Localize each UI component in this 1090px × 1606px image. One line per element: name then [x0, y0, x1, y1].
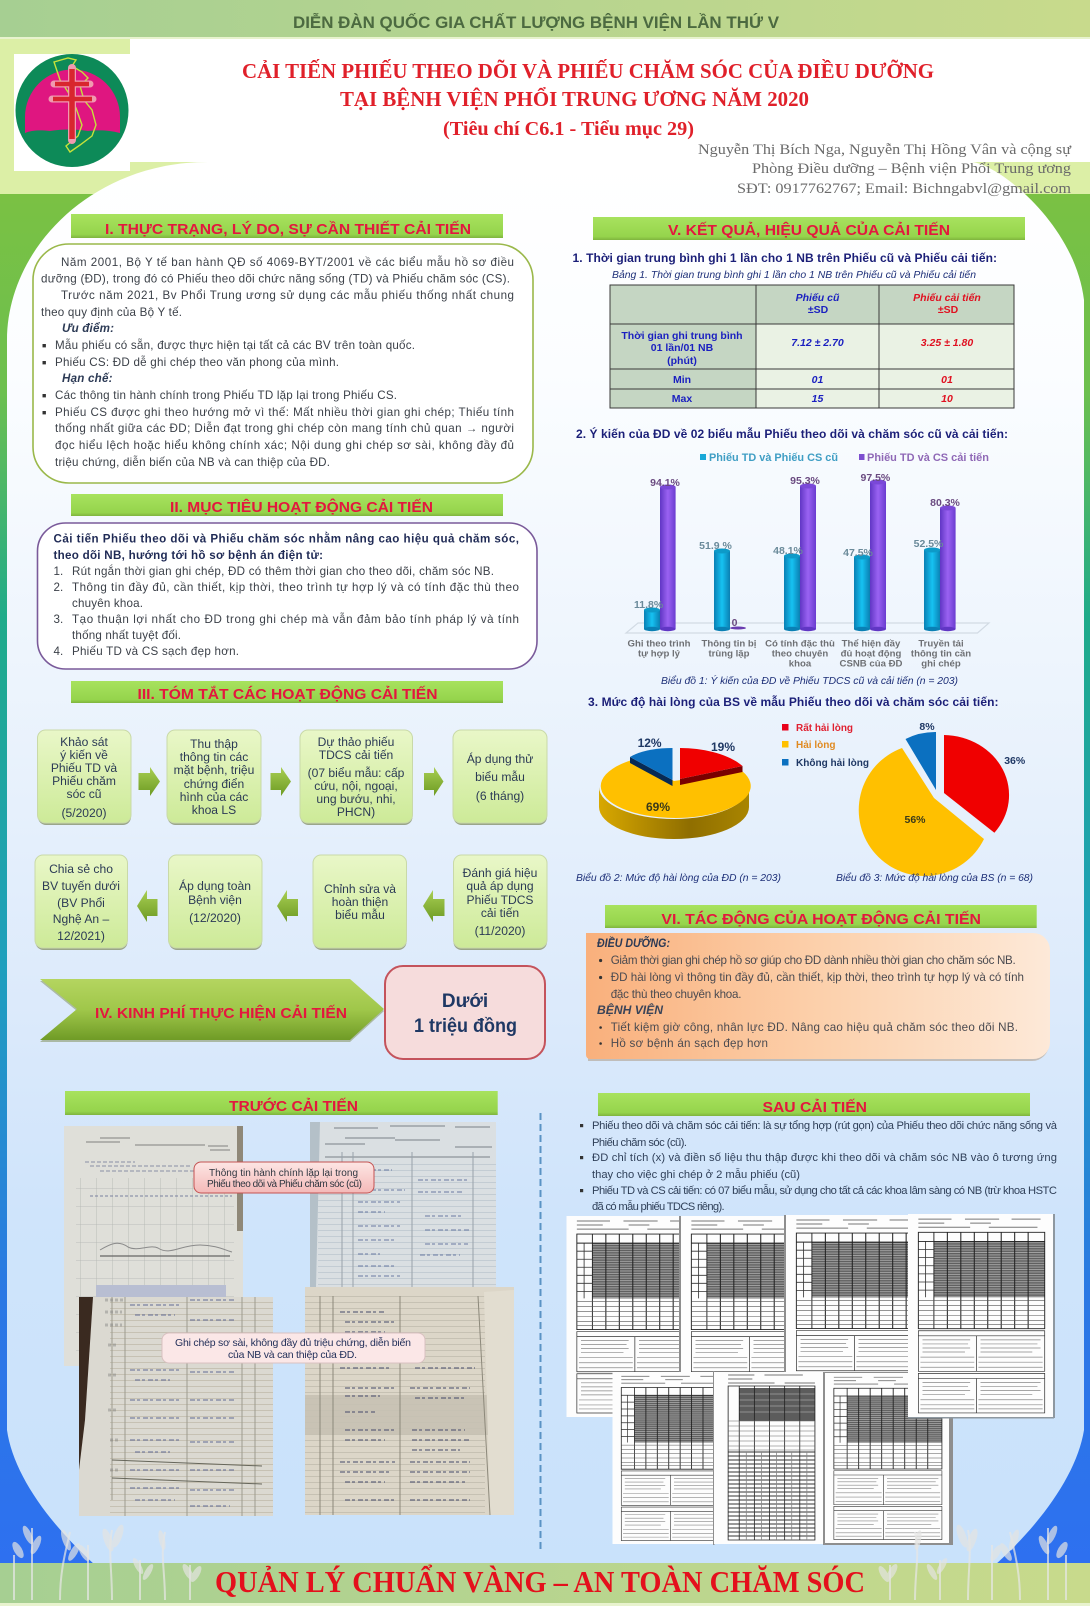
table caption: Bảng 1. Thời gian trung bình ghi 1 lần cho 1 NB trên Phiếu cũ và Phiếu cải tiến	[612, 269, 976, 281]
heading IV: budget arrow banner	[40, 979, 384, 1042]
decoration: plants right	[876, 1523, 1070, 1600]
panel: current situation text: Trước năm 2021, Bv Phổi Trung ương sử dụng các mẫu phiếu thống nhất chung	[61, 289, 514, 302]
panel: impact: Hồ sơ bệnh án sạch đẹp hơn	[611, 1037, 768, 1050]
arrow: step 6 to 7	[277, 890, 298, 922]
pie legend: Rất hải lòng	[796, 722, 853, 734]
panel: impact: ĐIỀU DƯỠNG:	[597, 937, 670, 950]
flow step 8: BV tuyến dưới	[42, 879, 120, 893]
title: (Tiêu chí C6.1 - Tiểu mục 29)	[443, 119, 694, 140]
panel: objectives: chuyên khoa.	[72, 597, 143, 610]
panel: objectives: Thông tin đầy đủ, cần thiết, kịp thời, theo trình tự hợp lý và có tính đặc thù theo	[72, 581, 519, 594]
chart captions 2 and 3: Biểu đồ 2: Mức độ hài lòng của ĐD (n = 203)	[576, 872, 781, 884]
flow step 1: Phiếu TD và	[51, 761, 117, 775]
table 1: 15	[812, 393, 823, 405]
bar chart: opinions: 97.5%	[861, 472, 891, 484]
flow step 5	[454, 855, 547, 950]
pie chart 3: doctor satisfaction: 36%	[1004, 755, 1026, 767]
pie chart 2: nurse satisfaction: 12%	[638, 736, 662, 750]
footer band	[0, 1563, 1090, 1606]
subheading 3: 3. Mức độ hài lòng của BS về mẫu Phiếu theo dõi và chăm sóc cải tiến:	[588, 694, 998, 709]
table 1: 01 lần/01 NB	[651, 342, 714, 354]
chart legend	[700, 452, 989, 464]
arrow: step 5 to 6	[423, 890, 444, 922]
authors	[698, 142, 1072, 197]
top banner: DIỄN ĐÀN QUỐC GIA CHẤT LƯỢNG BỆNH VIỆN LẦN THỨ V	[293, 12, 780, 32]
panel: objectives: Tạo thuận lợi nhất cho ĐD trong ghi chép mà vẫn đảm bảo tính pháp lý và tính	[72, 613, 519, 626]
table 1: 10	[941, 393, 953, 405]
panel: impact	[586, 933, 1050, 1061]
text: after improvement notes: Phiếu TD và CS cải tiến: có 07 biểu mẫu, sử dụng cho tất cả các khoa lâm sàng có NB (trừ khoa HSTC	[592, 1184, 1057, 1197]
photo: old form handwriting right	[305, 1287, 514, 1515]
heading II	[71, 494, 503, 516]
flow step 3	[300, 730, 412, 825]
flow step 6: Chỉnh sửa và	[324, 882, 396, 896]
heading II: II. MỤC TIÊU HOẠT ĐỘNG CẢI TIẾN	[170, 498, 433, 516]
heading: before	[65, 1091, 498, 1115]
pie legend	[782, 722, 869, 769]
panel: current situation text: đọc hiểu lệch hoặc hiểu không chính xác; Nội dung ghi chép sơ sài, không đầy đủ	[55, 439, 514, 452]
new forms collage	[566, 1214, 1055, 1545]
panel: current situation text: Ưu điểm:	[62, 322, 114, 335]
chart captions 2 and 3	[576, 872, 1033, 884]
panel: current situation text	[33, 244, 533, 483]
arrow: step 2 to 3	[270, 767, 291, 796]
flow step 8: Chia sẻ cho	[49, 862, 113, 876]
panel: current situation text: Phiếu CS được ghi theo hướng mở vì thế: Mất nhiều thời gian ghi chép; Thiếu tính	[55, 406, 514, 419]
panel: current situation text: dưỡng (ĐD), trong đó có Phiếu theo dõi chức năng sống (TD) và Phiếu chăm sóc (CS).	[41, 272, 510, 286]
table 1: ±SD	[938, 304, 959, 316]
text: after improvement notes: Phiếu chăm sóc (cũ).	[592, 1137, 687, 1149]
flow step 2: khoa LS	[192, 803, 236, 817]
flow step 4	[453, 730, 547, 825]
table 1: Phiếu cải tiến	[913, 292, 981, 304]
top banner	[0, 0, 1090, 39]
flow step 2: mặt bệnh, triệu	[174, 763, 254, 777]
photo: old vitals form	[64, 1126, 243, 1366]
pie chart 3: doctor satisfaction: 8%	[919, 721, 935, 733]
panel: current situation text: theo quy định của Bộ Y tế.	[41, 306, 182, 319]
panel: objectives: 2.	[54, 581, 63, 594]
pie chart 3: doctor satisfaction: 56%	[904, 814, 926, 826]
callout: repeated admin info: Thông tin hành chính lặp lại trong	[209, 1168, 358, 1179]
panel: objectives: thống nhất tuyệt đối.	[72, 629, 181, 642]
chart 1 caption: Biểu đồ 1: Ý kiến của ĐD về Phiếu TDCS cũ và cải tiến (n = 203)	[661, 674, 958, 687]
heading V	[593, 217, 1025, 240]
panel: impact: Tiết kiệm giờ công, nhân lực ĐD. Nâng cao hiệu quả chăm sóc theo dõi NB.	[611, 1021, 1018, 1034]
flow step 4: biểu mẫu	[475, 769, 525, 784]
bar chart: opinions: ghi chép	[921, 658, 961, 670]
flow step 5: Phiếu TDCS	[466, 893, 534, 907]
flow step 7: Bệnh viện	[188, 893, 242, 907]
flow step 8	[35, 855, 128, 950]
photo: old form handwriting left	[79, 1297, 273, 1516]
table 1: Phiếu cũ	[796, 292, 840, 304]
bar chart: opinions: 94.1%	[650, 477, 681, 489]
table 1: 3.25 ± 1.80	[921, 337, 973, 349]
flow step 8: (BV Phổi	[57, 896, 105, 910]
bar chart: opinions: 0	[732, 617, 738, 629]
arrow: step 1 to 2	[138, 767, 160, 796]
callout: repeated admin info	[194, 1162, 374, 1193]
heading III	[71, 681, 503, 703]
text: after improvement notes: thay cho việc ghi chép ở 2 mẫu phiếu (cũ)	[592, 1168, 800, 1181]
panel: objectives: 3.	[54, 613, 63, 626]
pie legend: Hải lòng	[796, 739, 836, 751]
callout: budget amount: Dưới	[442, 991, 488, 1012]
pie chart 2: nurse satisfaction: 69%	[646, 800, 670, 814]
panel: objectives: theo dõi NB, hướng tới hồ sơ bệnh án điện tử:	[54, 549, 323, 562]
heading III: III. TÓM TẮT CÁC HOẠT ĐỘNG CẢI TIẾN	[138, 685, 438, 703]
bar chart: opinions: Thông tin bị	[702, 638, 756, 650]
table 1: Min	[673, 374, 691, 386]
flow step 1	[38, 730, 131, 825]
flow step 1: (5/2020)	[61, 806, 107, 820]
flow step 6: hoàn thiện	[332, 895, 388, 909]
callout: budget amount: 1 triệu đồng	[414, 1016, 517, 1037]
bar chart: opinions: Ghi theo trình	[628, 638, 691, 650]
flow step 7: (12/2020)	[189, 911, 241, 925]
logo: hospital emblem	[14, 54, 130, 171]
panel: impact: đặc thù theo chuyên khoa.	[611, 988, 742, 1001]
callout: sketchy notes: của NB và can thiệp của ĐD.	[228, 1349, 357, 1361]
bar chart: opinions: 48.1%	[773, 545, 804, 557]
flow step 2: hình của các	[180, 790, 248, 804]
flow step 3: PHCN)	[337, 805, 375, 819]
panel: impact: ĐD hài lòng vì thông tin đầy đủ, cần thiết, kịp thời, theo trình tự hợp lý và có tính	[611, 971, 1024, 984]
panel: current situation text: triệu chứng, diễn biến của NB và can thiệp của ĐD.	[55, 456, 330, 469]
flow step 4: Áp dụng thử	[467, 751, 533, 766]
panel: objectives: Cải tiến Phiếu theo dõi và Phiếu chăm sóc nhằm nâng cao hiệu quả chăm sóc,	[54, 532, 519, 546]
heading IV: budget arrow banner: IV. KINH PHÍ THỰC HIỆN CẢI TIẾN	[95, 1004, 347, 1022]
callout: budget amount	[385, 966, 545, 1059]
title: TẠI BỆNH VIỆN PHỔI TRUNG ƯƠNG NĂM 2020	[340, 87, 809, 111]
table 1	[610, 285, 1014, 408]
panel: current situation text: Hạn chế:	[62, 372, 113, 385]
panel: objectives: Phiếu TD và CS sạch đẹp hơn.	[72, 645, 239, 658]
photo: old care form	[310, 1122, 496, 1287]
bar chart: opinions: đủ hoạt động	[841, 648, 902, 660]
flow step 3: ung bướu, nhi,	[316, 792, 396, 806]
authors: SĐT: 0917762767; Email: Bichngabvl@gmail.com	[737, 181, 1071, 197]
bar chart: opinions: thông tin cần	[911, 648, 971, 660]
flow step 2: thông tin các	[180, 750, 248, 764]
flow step 6	[313, 855, 406, 950]
flow step 8: 12/2021)	[57, 929, 105, 943]
pie chart 2: nurse satisfaction: 19%	[711, 740, 735, 754]
flow step 2	[167, 730, 261, 825]
flow step 3: Dự thảo phiếu	[318, 735, 394, 749]
flow step 7	[168, 855, 262, 950]
callout: sketchy notes	[162, 1333, 425, 1363]
table 1: 01	[812, 374, 823, 386]
table 1: ±SD	[808, 304, 829, 316]
panel: current situation text: thống nhất giữa các ĐD; Diễn đạt trong ghi chép còn mang tính chủ quan → người	[55, 422, 514, 435]
heading VI: VI. TÁC ĐỘNG CỦA HOẠT ĐỘNG CẢI TIẾN	[661, 910, 981, 928]
panel: current situation text: Mẫu phiếu có sẵn, được thực hiện tại tất cả các BV trên toàn quốc.	[55, 339, 415, 352]
column divider: dashed	[540, 1113, 542, 1552]
table 1: 7.12 ± 2.70	[791, 337, 844, 349]
callout: sketchy notes: Ghi chép sơ sài, không đầy đủ triệu chứng, diễn biến	[175, 1336, 411, 1349]
flow step 7: Áp dụng toàn	[179, 878, 251, 893]
bar chart: opinions: 51.9 %	[699, 540, 733, 552]
heading I	[71, 214, 503, 238]
authors: Nguyễn Thị Bích Nga, Nguyễn Thị Hồng Vân và cộng sự	[698, 142, 1072, 158]
bar chart: opinions: Thể hiện đầy	[842, 638, 901, 650]
arrow: step 7 to 8	[137, 890, 158, 922]
flow step 1: sóc cũ	[67, 787, 101, 801]
decoration: plants left	[10, 1523, 204, 1600]
flow step 5: cải tiến	[481, 906, 519, 920]
panel: current situation text: Các thông tin hành chính trong Phiếu TD lặp lại trong Phiếu CS.	[55, 389, 397, 402]
heading: after: SAU CẢI TIẾN	[762, 1099, 867, 1116]
flow step 1: ý kiến về	[60, 748, 108, 762]
bar chart: opinions: 95.3%	[790, 475, 821, 487]
flow step 5: (11/2020)	[475, 924, 525, 938]
flow step 8: Nghệ An –	[53, 912, 110, 926]
bar chart: opinions: khoa	[789, 658, 812, 670]
text: after improvement notes	[580, 1120, 1058, 1213]
subheading 2: 2. Ý kiến của ĐD về 02 biểu mẫu Phiếu theo dõi và chăm sóc cũ và cải tiến:	[576, 426, 1008, 441]
panel: current situation text: Năm 2001, Bộ Y tế ban hành QĐ số 4069-BYT/2001 về các biểu mẫu hồ sơ điều	[61, 256, 514, 269]
table 1: (phút)	[667, 355, 697, 367]
callout: repeated admin info: Phiếu theo dõi và Phiếu chăm sóc (cũ)	[207, 1178, 362, 1190]
flow step 2: chứng điển	[184, 777, 244, 791]
chart legend: Phiếu TD và CS cải tiến	[867, 452, 989, 464]
chart legend: Phiếu TD và Phiếu CS cũ	[709, 452, 838, 464]
pie chart 2: nurse satisfaction	[599, 736, 751, 839]
title: CẢI TIẾN PHIẾU THEO DÕI VÀ PHIẾU CHĂM SÓC CỦA ĐIỀU DƯỠNG	[242, 59, 934, 83]
bar chart: opinions: 80.3%	[930, 497, 961, 509]
flow step 1: Phiếu chăm	[52, 774, 116, 788]
panel: impact: BỆNH VIỆN	[597, 1003, 663, 1017]
flow step 2: Thu thập	[190, 737, 238, 751]
flow step 3: (07 biểu mẫu: cấp	[308, 765, 405, 780]
bar chart: opinions: Truyền tải	[918, 638, 964, 650]
text: after improvement notes: Phiếu theo dõi và chăm sóc cải tiến: là sự tổng hợp (rút gọn) của Phiếu theo dõi chức năng sống và	[592, 1120, 1058, 1132]
authors: Phòng Điều dưỡng – Bệnh viện Phổi Trung ương	[752, 161, 1072, 177]
panel: objectives: 4.	[54, 645, 63, 658]
flow step 4: (6 tháng)	[476, 789, 524, 803]
heading I: I. THỰC TRẠNG, LÝ DO, SỰ CẦN THIẾT CẢI TIẾN	[105, 220, 471, 238]
table 1: Max	[672, 393, 692, 405]
flow step 6: biểu mẫu	[335, 907, 385, 922]
title	[242, 59, 934, 140]
bar chart: opinions: 52.5%	[914, 538, 944, 550]
table 1: 01	[941, 374, 953, 386]
panel: current situation text: Phiếu CS: ĐD dễ ghi chép theo văn phong của mình.	[55, 356, 339, 369]
flow step 1: Khảo sát	[60, 735, 109, 749]
heading VI	[605, 905, 1037, 928]
text: after improvement notes: đã có mẫu phiếu TDCS riêng).	[592, 1200, 725, 1213]
text: after improvement notes: ĐD chỉ tích (x) và điền số liệu thu thập được khi theo dõi và chăm sóc NB vào ô tương ứng	[592, 1152, 1057, 1164]
bar chart: opinions	[626, 472, 989, 670]
chart captions 2 and 3: Biểu đồ 3: Mức độ hài lòng của BS (n = 68)	[836, 872, 1033, 884]
table 1: Thời gian ghi trung bình	[621, 330, 743, 342]
subheading 1: 1. Thời gian trung bình ghi 1 lần cho 1 NB trên Phiếu cũ và Phiếu cải tiến:	[572, 251, 997, 265]
panel: objectives: 1.	[54, 565, 63, 578]
panel: objectives	[38, 523, 537, 669]
bar chart: opinions: 11.8%	[634, 599, 664, 611]
pie legend: Không hải lòng	[796, 757, 869, 769]
arrow: step 3 to 4	[424, 767, 444, 796]
flow step 3: cứu, nội, ngoại,	[314, 779, 398, 793]
bar chart: opinions: tự hợp lý	[638, 648, 681, 660]
panel: objectives: Rút ngắn thời gian ghi chép, ĐD có thêm thời gian cho theo dõi, chăm sóc NB.	[72, 565, 494, 578]
bar chart: opinions: 47.5%	[843, 547, 874, 559]
bar chart: opinions: theo chuyên	[772, 648, 828, 660]
pie chart 3: doctor satisfaction	[859, 721, 1026, 876]
heading: before: TRƯỚC CẢI TIẾN	[229, 1097, 358, 1115]
bar chart: opinions: trùng lặp	[708, 648, 750, 660]
flow step 3: TDCS cải tiến	[319, 748, 393, 762]
panel: impact: Giảm thời gian ghi chép hồ sơ giúp cho ĐD dành nhiều thời gian cho chăm sóc NB.	[611, 954, 1016, 967]
bar chart: opinions: Có tính đặc thù	[765, 638, 835, 650]
heading: after	[598, 1093, 1030, 1116]
flow step 5: quả áp dụng	[466, 879, 534, 893]
heading V: V. KẾT QUẢ, HIỆU QUẢ CỦA CẢI TIẾN	[668, 221, 950, 239]
flow step 5: Đánh giá hiệu	[463, 866, 537, 880]
bar chart: opinions: CSNB của ĐD	[840, 658, 903, 670]
footer slogan: QUẢN LÝ CHUẨN VÀNG – AN TOÀN CHĂM SÓC	[215, 1564, 865, 1599]
